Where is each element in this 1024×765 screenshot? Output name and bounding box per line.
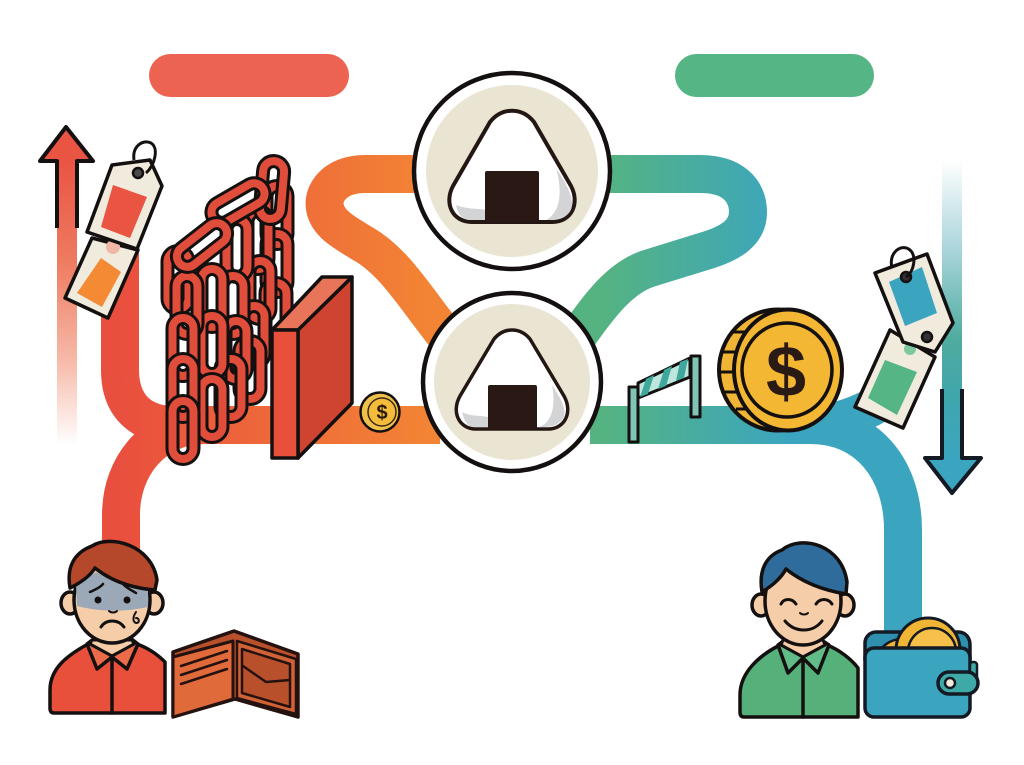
icon: barricade hurdle <box>629 356 700 442</box>
hair <box>69 541 157 590</box>
green label pill <box>675 54 874 97</box>
red label pill <box>149 54 349 97</box>
central node: lower onigiri <box>423 293 601 471</box>
hair <box>761 543 847 594</box>
icon: small coin: $ <box>376 402 388 424</box>
face <box>74 557 150 643</box>
shirt <box>740 645 858 717</box>
ears <box>752 594 770 616</box>
neck <box>781 640 825 657</box>
collar <box>778 636 829 717</box>
ears <box>61 592 79 614</box>
red-orange flow pipes <box>120 174 445 560</box>
icon: empty wallet <box>173 631 298 717</box>
icon: large gold coin <box>719 310 842 430</box>
icon: red wall barrier <box>272 277 352 458</box>
person: happy consumer <box>740 543 858 717</box>
facial features <box>94 596 102 604</box>
icon: heavy chains <box>168 160 288 459</box>
green-blue flow pipes <box>575 174 903 640</box>
person: worried consumer <box>50 541 165 713</box>
icon: small coin <box>360 392 400 432</box>
gloom band <box>76 572 148 611</box>
collar <box>87 634 138 713</box>
face <box>765 557 841 645</box>
arrow: price rising <box>40 127 93 445</box>
shirt <box>50 644 165 713</box>
icon: full wallet with coins <box>865 618 978 717</box>
arrow: price falling <box>925 160 981 493</box>
icon: large gold coin: $ <box>766 332 806 412</box>
central node: upper onigiri <box>414 73 610 269</box>
neck <box>90 640 134 656</box>
icon: falling price tags <box>855 248 953 428</box>
smiling features <box>781 600 832 604</box>
icon: rising price tags <box>65 142 162 318</box>
